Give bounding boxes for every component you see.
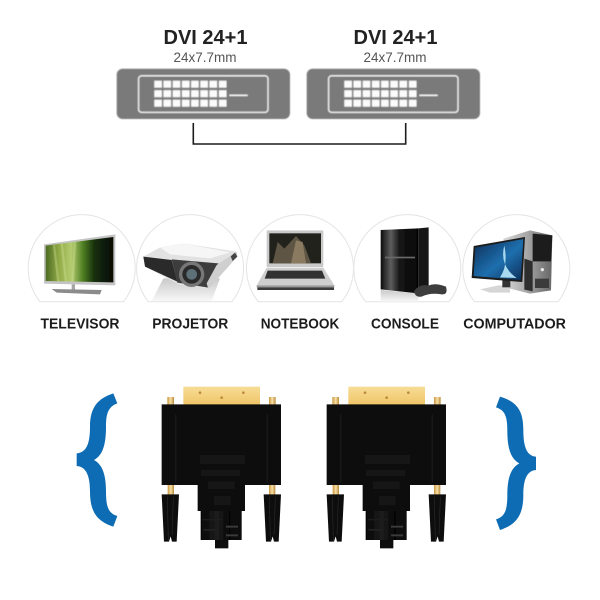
label: CONSOLE <box>371 316 439 332</box>
label: PROJETOR <box>152 316 228 332</box>
device: computador <box>463 215 570 332</box>
heading: left connector: DVI 24+1 <box>164 27 247 49</box>
icon: game console <box>381 227 447 302</box>
label: TELEVISOR <box>40 316 120 332</box>
semicircle frame <box>28 215 135 302</box>
semicircle frame <box>246 215 353 302</box>
heading: right connector: DVI 24+1 <box>354 27 437 49</box>
semicircle frame <box>354 215 461 302</box>
text: left connector dimensions: 24x7.7mm <box>173 50 237 65</box>
semicircle frame <box>463 215 570 302</box>
device: televisor <box>28 215 135 332</box>
icon: right brace <box>496 397 536 530</box>
device: projetor <box>137 215 244 332</box>
label: NOTEBOOK <box>261 316 339 332</box>
device: notebook <box>246 215 353 332</box>
icon: television <box>44 234 115 294</box>
panel: compatible devices <box>28 215 570 332</box>
icon: right DVI port <box>307 69 480 119</box>
icon: left DVI plug <box>162 387 281 548</box>
icon: left brace <box>77 393 117 527</box>
panel: DVI port specification <box>117 27 480 144</box>
text: right connector dimensions: 24x7.7mm <box>363 50 427 65</box>
icon: projector <box>143 243 237 301</box>
icon: notebook <box>257 230 334 290</box>
icon: desktop computer <box>472 230 552 294</box>
bracket connecting the two ports <box>193 123 406 144</box>
label: COMPUTADOR <box>463 316 566 332</box>
icon: right DVI plug <box>327 387 446 548</box>
device: console <box>354 215 461 332</box>
panel: DVI connectors <box>77 387 536 548</box>
semicircle frame <box>137 215 244 302</box>
icon: left DVI port <box>117 69 290 119</box>
